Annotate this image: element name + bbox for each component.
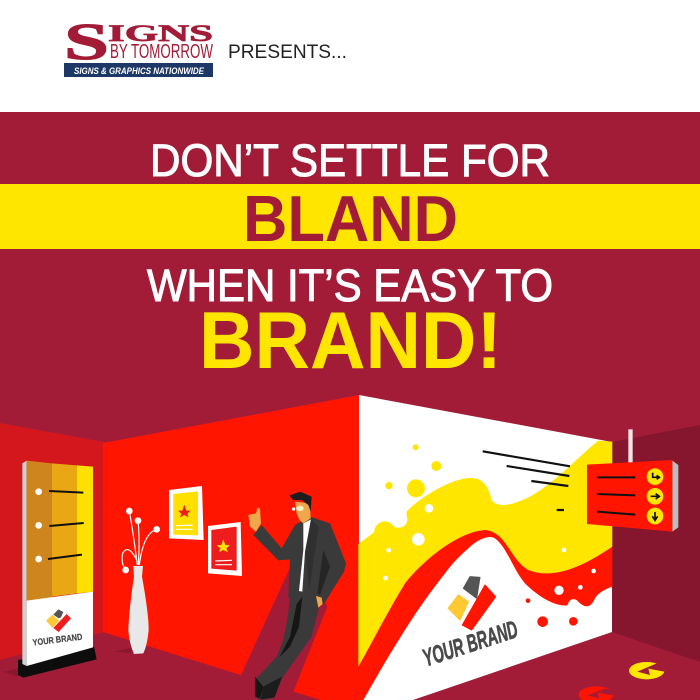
yellow wave [358, 441, 612, 667]
red wave [358, 530, 612, 700]
man shadow on wall [240, 557, 327, 700]
panel: right illustration [358, 429, 678, 700]
hanging sign [587, 429, 678, 532]
man in dark suit [248, 492, 346, 700]
floor stand sign [3, 461, 97, 678]
presents label: PRESENTS... [228, 42, 347, 63]
panel: left illustration [3, 461, 242, 678]
heading line 2: WHEN IT’S EASY TO [147, 260, 553, 311]
heading line 1: DON’T SETTLE FOR [150, 135, 550, 186]
yellow dots [385, 444, 441, 497]
logo: Signs By Tomorrow [64, 14, 213, 77]
brand logo [448, 577, 496, 630]
logo: Signs By Tomorrow: SIGNS & GRAPHICS NATIONWIDE [74, 66, 205, 76]
panel: left wall [0, 423, 104, 660]
logo: Signs By Tomorrow: IGNS [108, 21, 213, 46]
floor stand sign: YOUR BRAND [32, 632, 83, 648]
panel: white right wall [359, 395, 612, 700]
panel: right dark wall [612, 425, 700, 662]
red dots [526, 598, 578, 627]
panel: back wall [103, 395, 359, 700]
heading: BRAND!: BRAND! [199, 296, 502, 386]
vase with flowers [115, 508, 160, 654]
black text lines [483, 451, 570, 510]
logo: Signs By Tomorrow: BY TOMORROW [110, 41, 213, 63]
heading: BLAND: BLAND [243, 182, 458, 255]
your brand wordmark: YOUR BRAND [420, 616, 521, 672]
floor arrow marker: yellow [629, 662, 665, 679]
white dots [383, 504, 596, 595]
picture frame: red [208, 522, 242, 576]
floor arrow marker: red [579, 686, 613, 700]
picture frame: yellow [169, 486, 204, 540]
white notch in yellow wave [391, 511, 407, 528]
yellow banner [0, 184, 700, 249]
panel: man and shadow [240, 492, 346, 700]
logo: Signs By Tomorrow: S [64, 14, 109, 71]
